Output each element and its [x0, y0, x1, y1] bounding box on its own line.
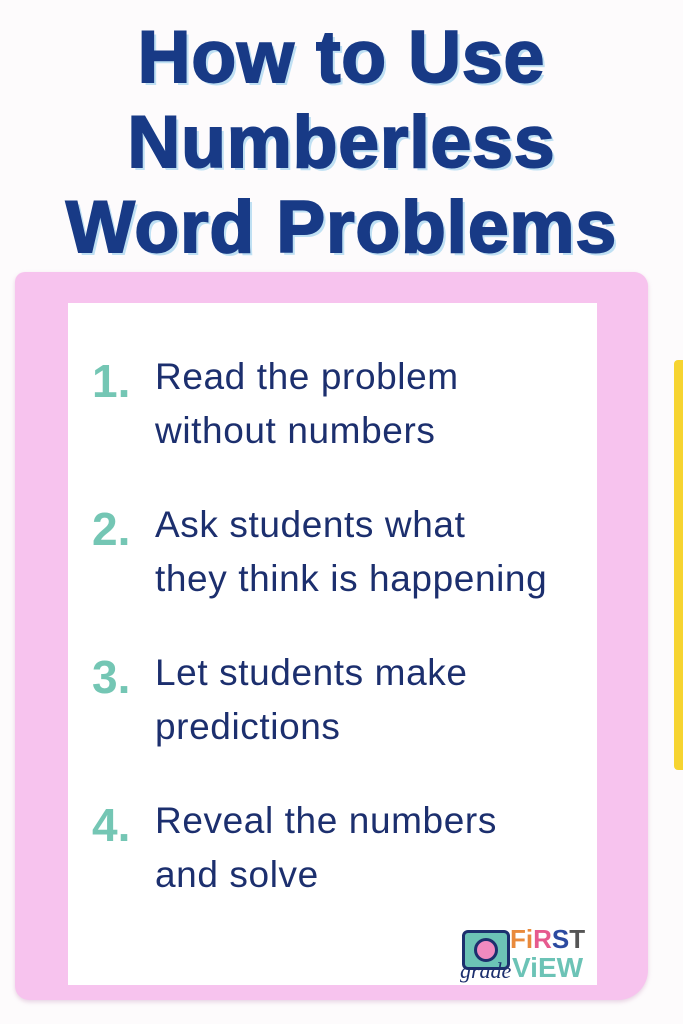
step 1: [92, 355, 459, 451]
logo: [460, 924, 585, 983]
text: Let students make: [155, 652, 468, 693]
paper sheet: [68, 303, 597, 985]
text: 4.: [92, 799, 130, 851]
text: they think is happening: [155, 558, 547, 599]
text: Read the problem: [155, 356, 459, 397]
text: 3.: [92, 651, 130, 703]
text: Ask students what: [155, 504, 465, 545]
logo: FiRST: [510, 924, 585, 954]
text: and solve: [155, 854, 319, 895]
pencil: [674, 360, 683, 770]
logo: ViEW: [512, 952, 583, 983]
title: Numberless: [128, 102, 555, 183]
step 3: [92, 651, 468, 747]
text: Reveal the numbers: [155, 800, 497, 841]
text: 1.: [92, 355, 130, 407]
title: How to Use: [138, 17, 545, 98]
title: Word Problems: [66, 187, 617, 268]
text: predictions: [155, 706, 341, 747]
step 2: [92, 503, 547, 599]
logo: grade: [460, 958, 511, 983]
step 4: [92, 799, 497, 895]
text: 2.: [92, 503, 130, 555]
text: without numbers: [155, 410, 435, 451]
title: [64, 17, 617, 268]
binder: [15, 272, 648, 1000]
